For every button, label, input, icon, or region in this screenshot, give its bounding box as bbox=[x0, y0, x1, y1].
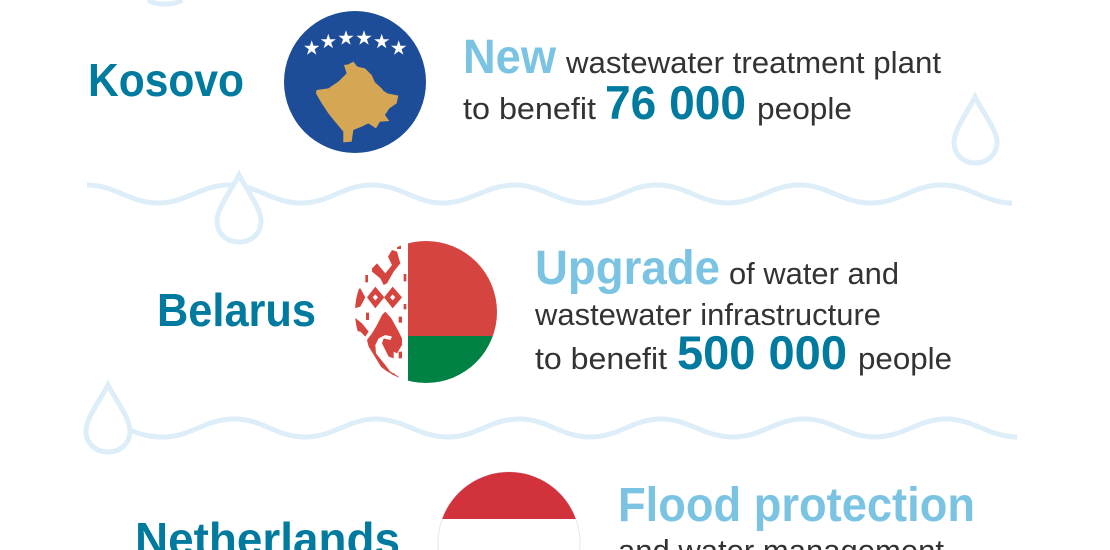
text: Upgrade of water and wastewater infrastructure: wastewater infrastructure bbox=[534, 297, 881, 332]
text: New wastewater treatment plant: people bbox=[757, 91, 852, 126]
icon: water drop on wave one bbox=[217, 175, 261, 242]
text: New wastewater treatment plant: wastewater treatment plant bbox=[565, 45, 941, 80]
text: Upgrade of water and wastewater infrastructure: to benefit bbox=[535, 341, 667, 376]
panel: Belarus bbox=[157, 241, 952, 385]
wave divider one bbox=[87, 185, 1012, 203]
text: Upgrade of water and wastewater infrastructure: of water and bbox=[729, 256, 899, 291]
text: New wastewater treatment plant: 76 000 bbox=[605, 76, 746, 129]
panel: Netherlands bbox=[135, 472, 975, 550]
heading: Kosovo: Kosovo bbox=[88, 54, 244, 106]
text: Upgrade of water and wastewater infrastructure: 500 000 bbox=[677, 326, 847, 379]
panel: Kosovo bbox=[88, 11, 941, 153]
icon: flag of Kosovo bbox=[284, 11, 426, 153]
text: New wastewater treatment plant: New bbox=[463, 31, 557, 84]
heading: Belarus: Belarus bbox=[157, 284, 316, 336]
text: Upgrade of water and wastewater infrastructure: people bbox=[858, 341, 952, 376]
icon: flag of the Netherlands bbox=[438, 472, 580, 550]
icon: water drop on wave two bbox=[86, 385, 130, 452]
text: New wastewater treatment plant bbox=[463, 31, 941, 129]
wave divider two bbox=[130, 419, 1017, 437]
icon: water drop right bbox=[954, 97, 997, 163]
icon: flag of Belarus bbox=[354, 241, 498, 385]
text: Flood protection and water management: Flood protection bbox=[618, 479, 975, 532]
text: Upgrade of water and wastewater infrastructure bbox=[534, 242, 952, 379]
icon: water drop partially cut at top bbox=[148, 0, 182, 4]
text: Upgrade of water and wastewater infrastructure: Upgrade bbox=[535, 242, 720, 295]
text: New wastewater treatment plant: to benefit bbox=[463, 91, 596, 126]
